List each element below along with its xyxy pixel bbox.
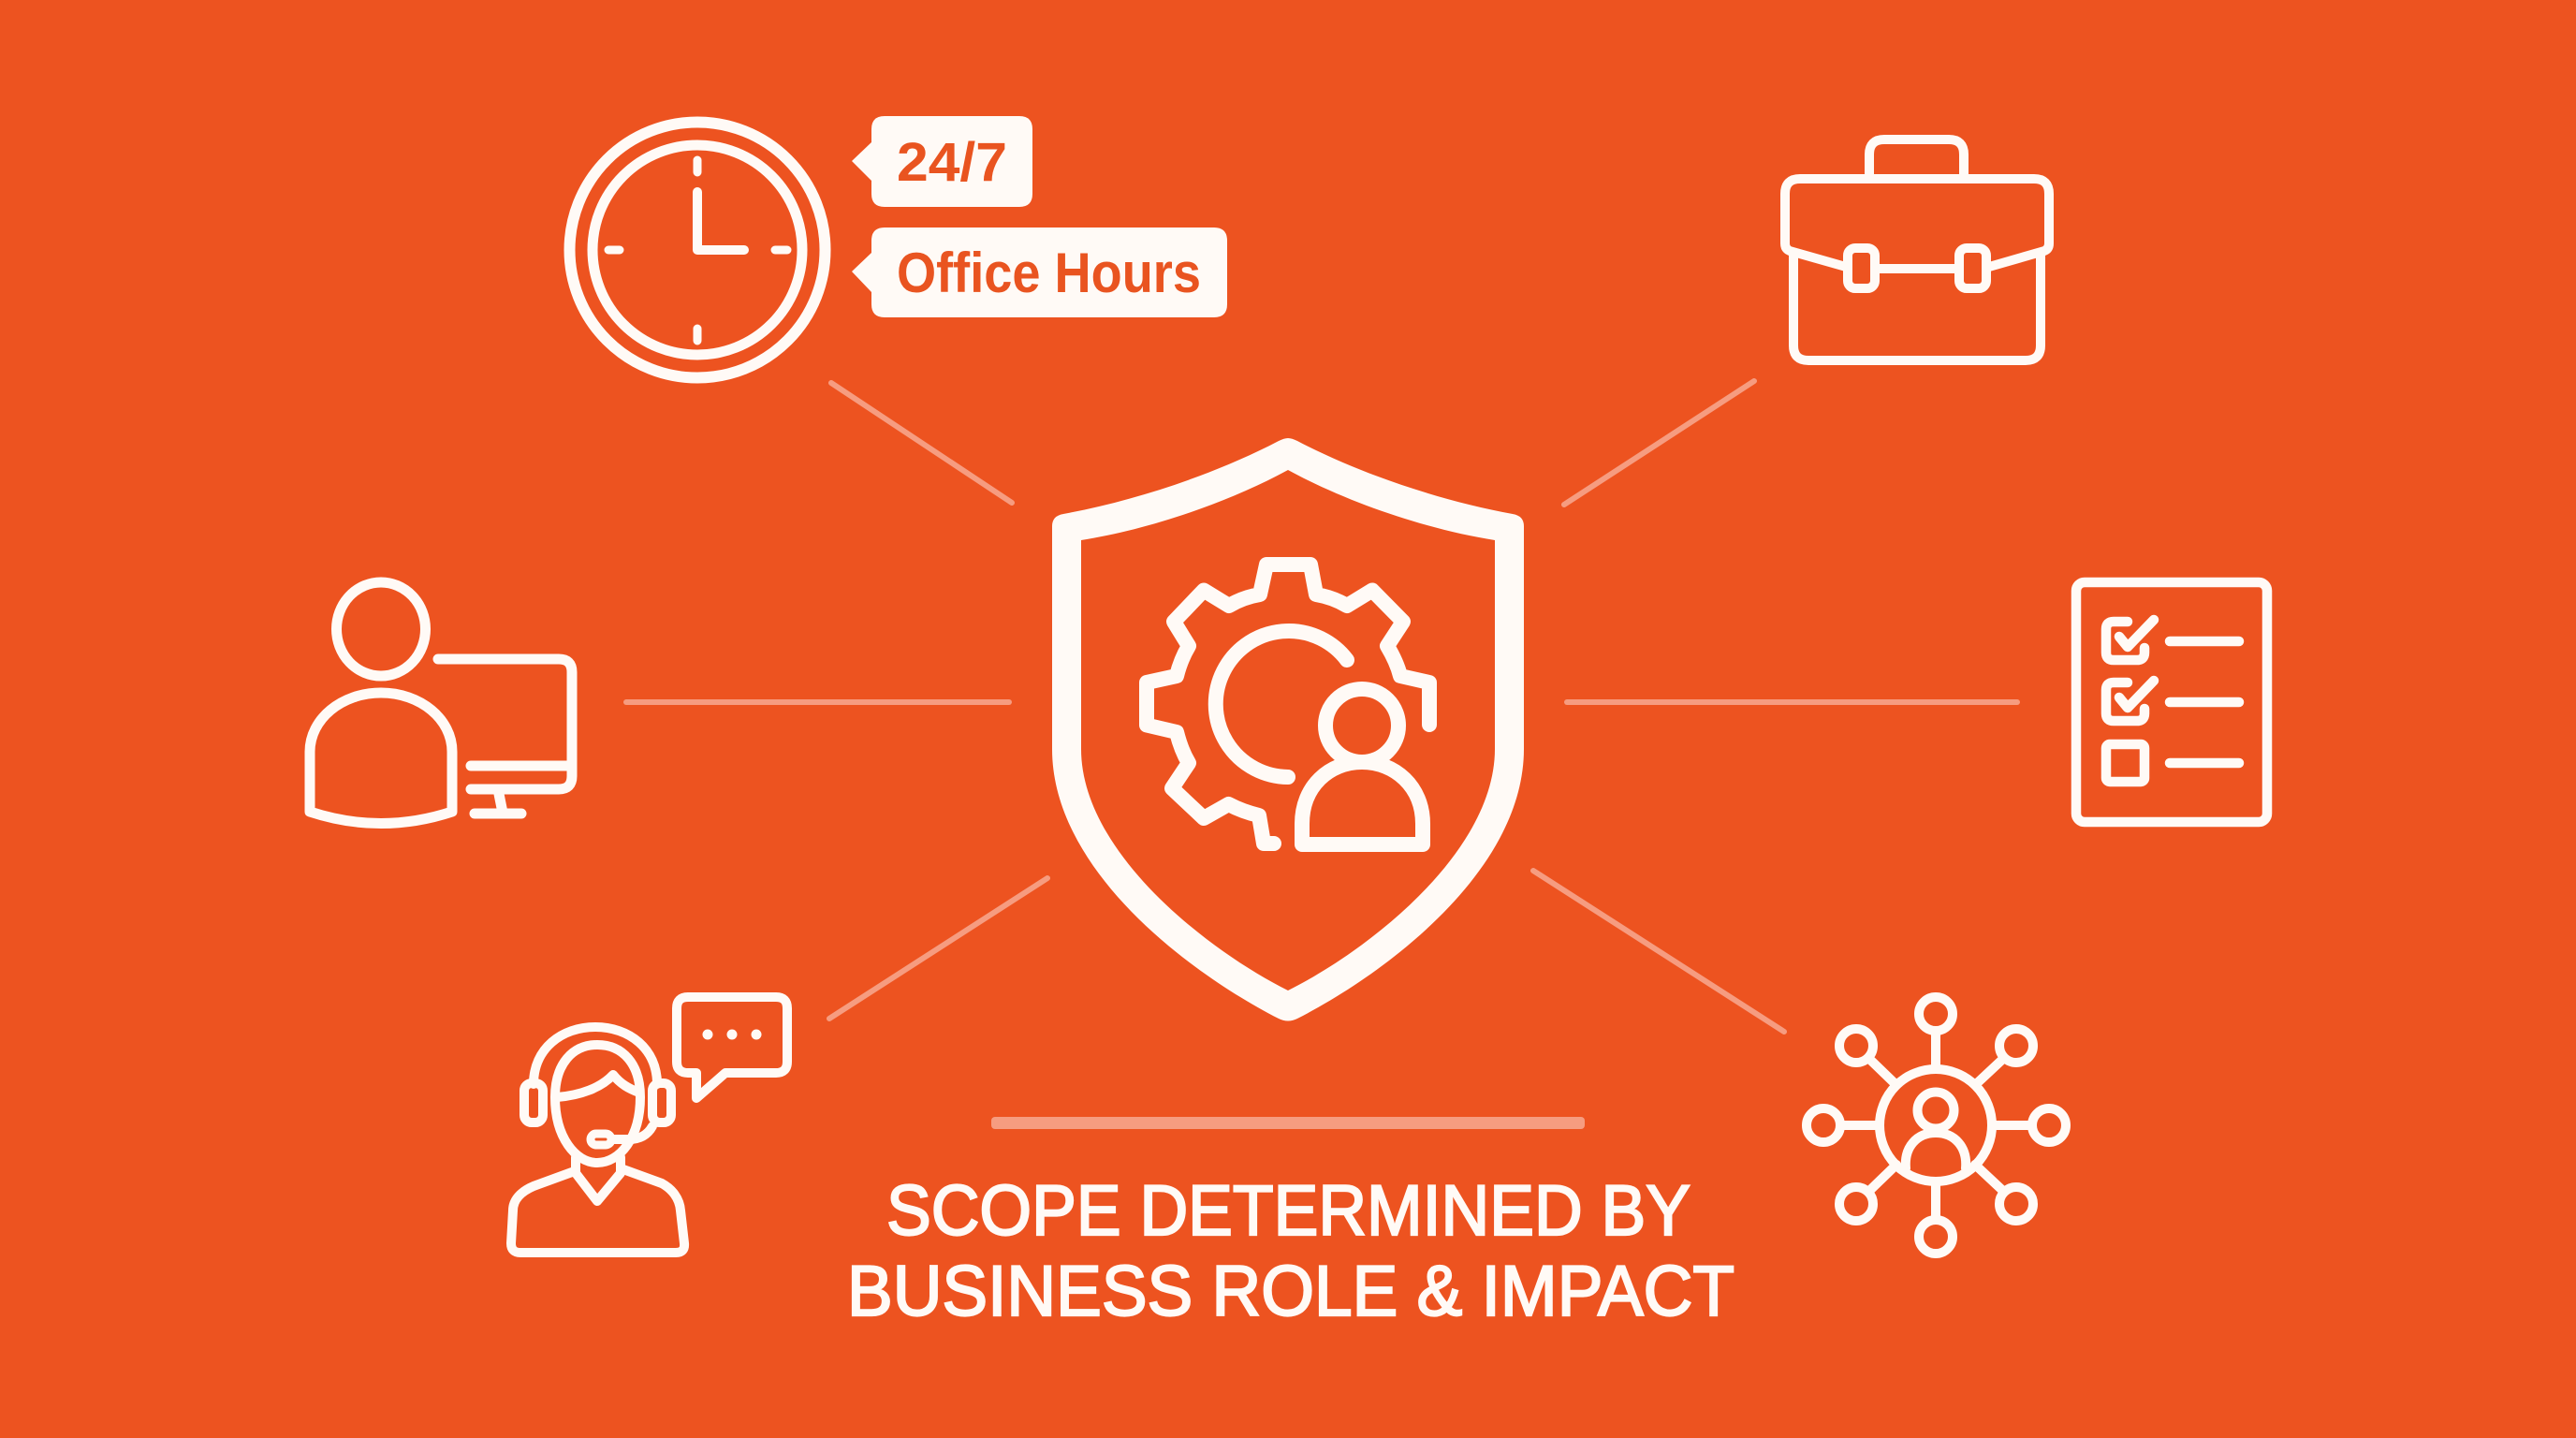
callout: 24/7: 24/7: [897, 132, 1007, 193]
icon: briefcase: [1785, 139, 2049, 360]
heading: SCOPE DETERMINED BY: [886, 1171, 1690, 1251]
icon: network around person: [1807, 997, 2066, 1254]
connector: briefcase to shield: [1564, 381, 1754, 505]
connector: network to shield: [1533, 871, 1784, 1032]
heading: [847, 1171, 1734, 1331]
connector: checklist to shield: [1567, 699, 2017, 705]
callout: Office Hours: [852, 227, 1227, 317]
connector: clock to shield: [831, 383, 1012, 503]
callout: 24/7: [852, 116, 1032, 207]
icon: support agent with speech bubble: [511, 997, 787, 1253]
icon: shield with gear and person: [1052, 438, 1524, 1020]
heading: BUSINESS ROLE & IMPACT: [847, 1252, 1734, 1331]
divider bar above heading: [991, 1117, 1585, 1129]
icon: checklist: [2076, 582, 2267, 822]
callout: Office Hours: Office Hours: [897, 242, 1201, 304]
connector: user at computer to shield: [626, 699, 1009, 705]
gear outline: [1147, 565, 1429, 844]
connector: support agent to shield: [829, 878, 1047, 1019]
shield outline: [1052, 438, 1524, 1020]
gear inner arc: [1216, 631, 1347, 777]
person: [1302, 689, 1423, 844]
icon: clock: [569, 122, 826, 378]
icon: user at computer: [310, 582, 572, 824]
